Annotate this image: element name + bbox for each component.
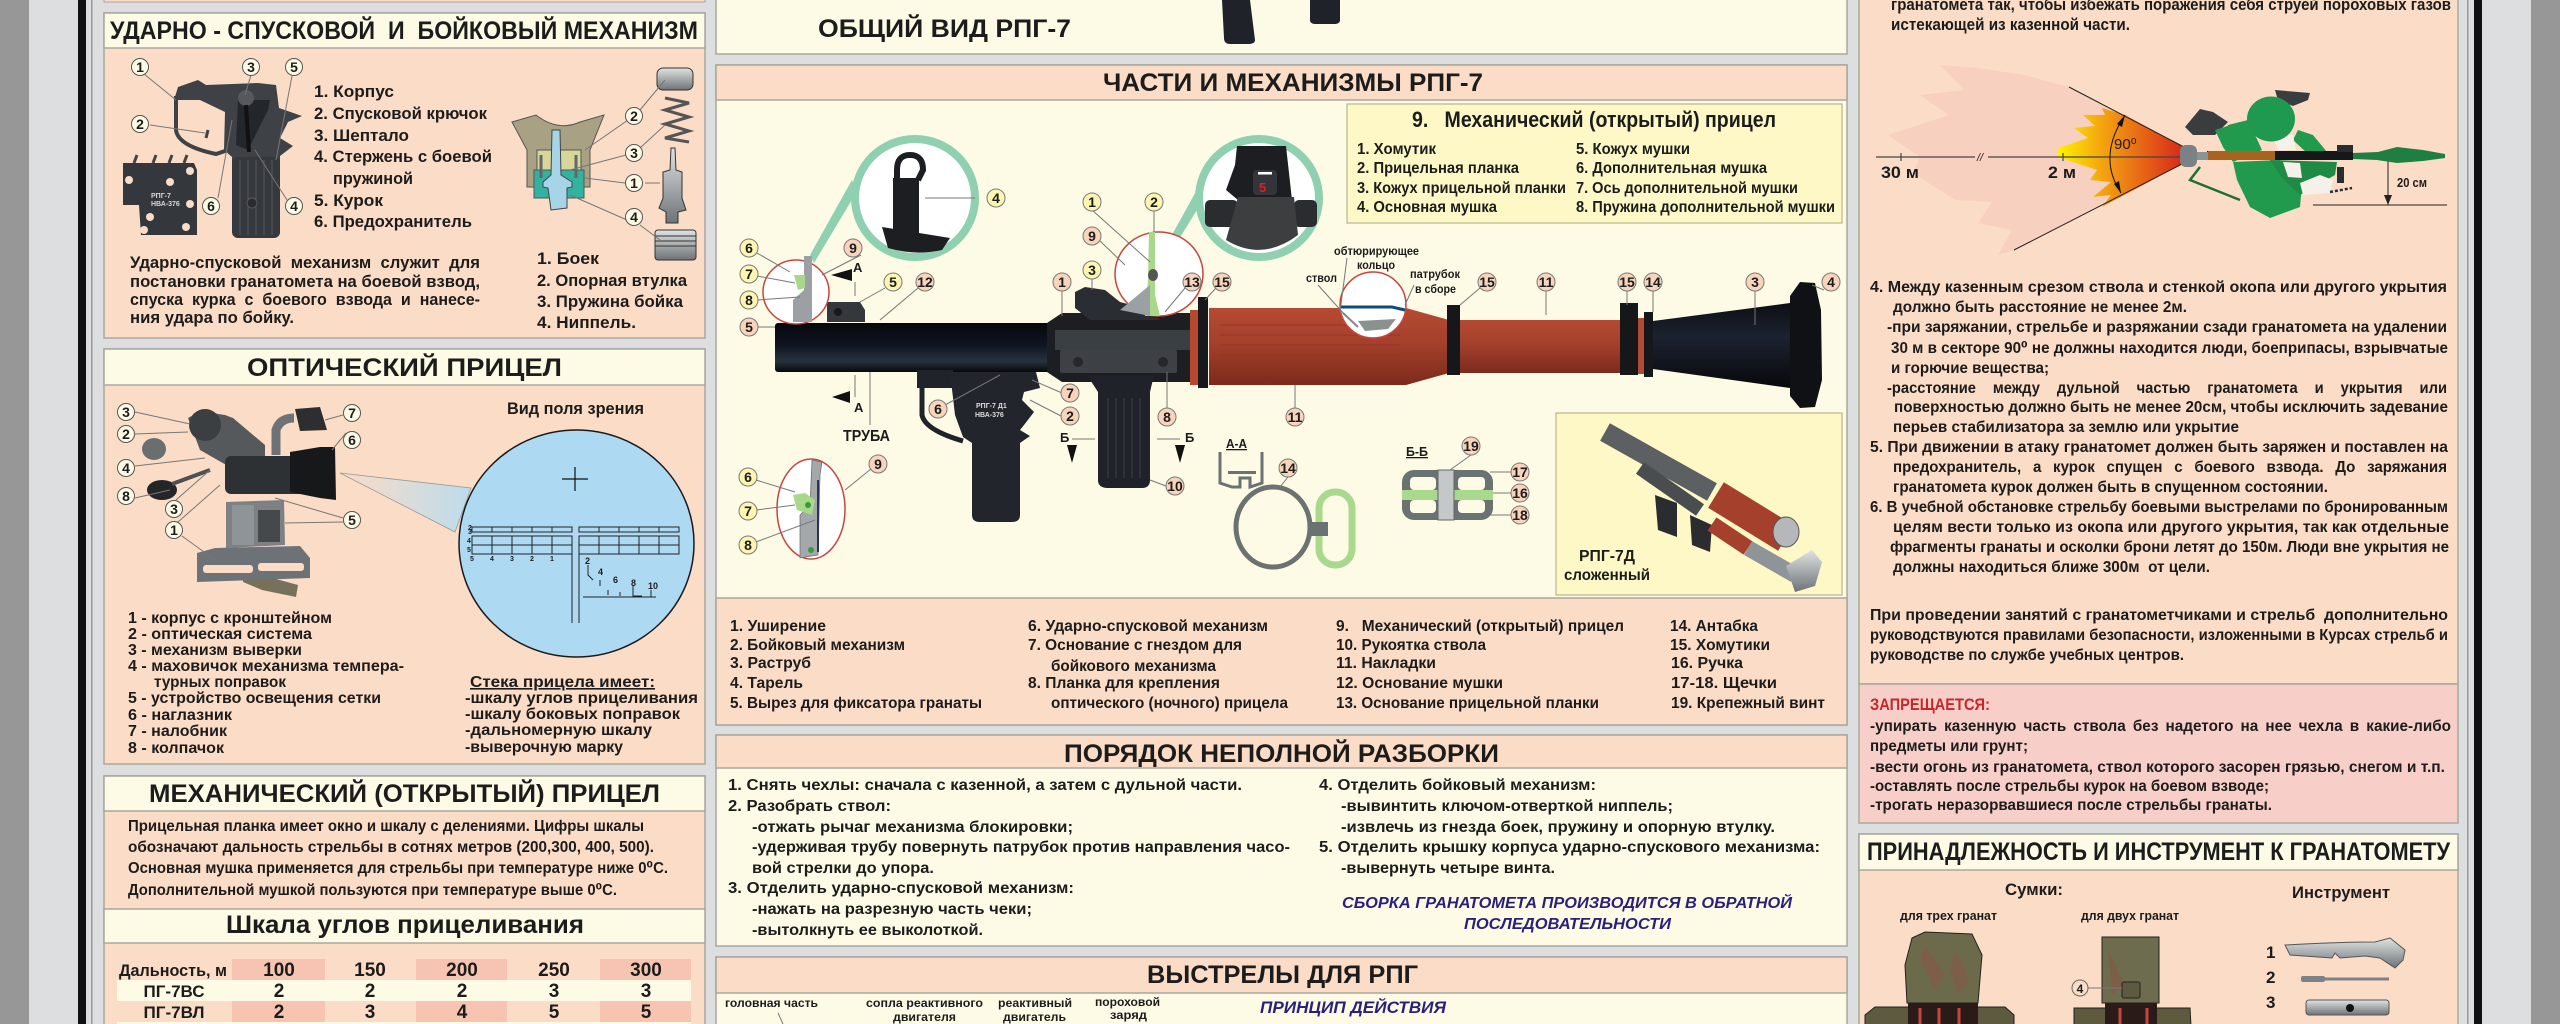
grip section Б-Б: Б-Б bbox=[1406, 444, 1428, 459]
section arrows and labels: обтюрирующее bbox=[1334, 244, 1419, 258]
number markers: launcher: 8 bbox=[744, 537, 752, 553]
chart: field of view reticle: 2 bbox=[468, 525, 472, 532]
number markers: launcher: 11 bbox=[1539, 274, 1554, 290]
leader lines and number markers: 6 bbox=[207, 198, 215, 214]
parts: cap, spring, pin, nipple bbox=[655, 68, 696, 260]
leader lines and number markers: 3 bbox=[247, 59, 255, 75]
leader lines and markers: optical sight: 3 bbox=[170, 501, 178, 517]
number markers: launcher: 14 bbox=[1280, 460, 1296, 476]
section arrows and labels: патрубок bbox=[1410, 267, 1461, 281]
label: field of view: Вид поля зрения bbox=[507, 399, 644, 418]
number markers: launcher: 2 bbox=[1066, 408, 1074, 424]
diagram: danger zone: 30 м bbox=[1881, 163, 1919, 182]
RPG-7 launcher drawing: РПГ-7 Д1 bbox=[976, 403, 1007, 410]
list: optical sight parts: 1 - корпус с кронштейном bbox=[128, 610, 332, 627]
table: aiming angles bbox=[117, 959, 691, 1024]
leader lines and markers: optical sight bbox=[118, 404, 360, 560]
leader lines and markers: optical sight: 7 bbox=[348, 405, 356, 421]
text: mechanical sight description: Дополнительной мушкой пользуются при температуре выше 0⁰С. bbox=[128, 882, 617, 899]
text: safety rules 4-6: 6. В учебной обстановке стрельбу боевыми выстрелами по бронированным bbox=[1870, 499, 2448, 516]
round part labels: реактивный bbox=[998, 996, 1072, 1010]
icon: soldier with launcher bbox=[2180, 90, 2445, 218]
number markers: launcher: 4 bbox=[992, 190, 1000, 206]
heading: operating principle: ПРИНЦИП ДЕЙСТВИЯ bbox=[1260, 997, 1447, 1017]
table: aiming angles: 2 bbox=[274, 981, 284, 1002]
text: prohibited list: -трогать неразорвавшиеся после стрельбы гранаты. bbox=[1870, 797, 2272, 814]
diagram: danger zone: // bbox=[1976, 152, 1984, 164]
table: aiming angles: 300 bbox=[630, 960, 662, 981]
panel: accessories and tools bbox=[1859, 834, 2458, 1024]
text: disassembly steps left bbox=[728, 777, 1290, 939]
list: firing mechanism parts bbox=[537, 249, 688, 332]
text: safety rules 4-6 bbox=[1870, 279, 2449, 576]
leader lines and markers: optical sight: 5 bbox=[348, 512, 356, 528]
leader lines and number markers: 4 bbox=[290, 198, 298, 214]
number markers: launcher: 19 bbox=[1463, 438, 1479, 454]
text: reticle contents bbox=[465, 674, 698, 756]
table: aiming angles: 3 bbox=[365, 1002, 375, 1023]
list: optical sight parts: 5 - устройство освещения сетки bbox=[128, 690, 381, 707]
number markers: launcher: 5 bbox=[889, 274, 897, 290]
chart: field of view reticle bbox=[459, 430, 694, 657]
number markers: launcher: 1 bbox=[1058, 274, 1066, 290]
table: aiming angles: 4 bbox=[457, 1002, 468, 1023]
text: trigger purpose: постановки гранатомета на боевой взвод, bbox=[130, 272, 480, 291]
icon: tools: 3 bbox=[2266, 993, 2275, 1012]
leader lines and markers: optical sight: 1 bbox=[170, 522, 178, 538]
text: reticle contents: -шкалу углов прицеливания bbox=[465, 690, 698, 707]
icon: bag for two grenades bbox=[2072, 937, 2191, 1024]
list: launcher parts: 10. Рукоятка ствола bbox=[1336, 637, 1486, 654]
list: launcher parts: 5. Вырез для фиксатора гранаты bbox=[730, 695, 982, 712]
table: aiming angles: 200 bbox=[446, 960, 478, 981]
list: launcher parts: 17-18. Щечки bbox=[1671, 675, 1777, 692]
number markers: launcher: 9 bbox=[1088, 228, 1096, 244]
text: safety rules 4-6: целям вести только из окопа или другого укрытия, так как отдельные bbox=[1893, 519, 2449, 536]
list: optical sight parts: 4 - маховичок механизма темпера- bbox=[128, 658, 404, 675]
leader lines and number markers: 1 bbox=[136, 59, 144, 75]
inset: front sight cross-section bbox=[777, 459, 845, 559]
section arrows and labels: в сборе bbox=[1415, 282, 1456, 296]
text: additional rules bbox=[1870, 607, 2448, 664]
table: aiming angles: Дальность, м bbox=[119, 961, 227, 980]
text: prohibited list: -вести огонь из гранатомета, ствол которого засорен грязью, снегом и т.п. bbox=[1870, 759, 2445, 776]
labels: bags and tools: для двух гранат bbox=[2081, 908, 2179, 923]
labels: bags and tools bbox=[1900, 880, 2390, 923]
text: reticle contents: Стека прицела имеет: bbox=[470, 674, 655, 691]
text: prohibited list: предметы или грунт; bbox=[1870, 738, 2028, 755]
text: safety rules 4-6: 4. Между казенным срезом ствола и стенкой окопа или другого укрытия bbox=[1870, 279, 2447, 296]
photo: optical sight bbox=[142, 407, 336, 597]
list: launcher parts: 19. Крепежный винт bbox=[1671, 695, 1825, 712]
list: optical sight parts bbox=[128, 610, 404, 757]
list: optical sight parts: 8 - колпачок bbox=[128, 740, 225, 757]
icon: tools: 2 bbox=[2266, 968, 2275, 987]
panel: mechanical sight bbox=[104, 776, 705, 1024]
leader lines and number markers: 3 bbox=[630, 145, 638, 161]
chart: field of view reticle: 4 bbox=[598, 567, 603, 577]
table: aiming angles: 2 bbox=[365, 981, 375, 1002]
table: aiming angles: 2 bbox=[457, 981, 467, 1002]
list: optical sight parts: 7 - налобник bbox=[128, 723, 228, 740]
table: aiming angles: 250 bbox=[538, 960, 570, 981]
heading: mechanical sight: МЕХАНИЧЕСКИЙ (ОТКРЫТЫЙ) ПРИЦЕЛ bbox=[149, 778, 660, 808]
heading: optical sight: ОПТИЧЕСКИЙ ПРИЦЕЛ bbox=[247, 352, 562, 382]
section arrows and labels: ствол bbox=[1306, 271, 1337, 285]
text: additional rules: При проведении занятий с гранатометчиками и стрельб дополнительно bbox=[1870, 607, 2448, 624]
diagram: danger zone: 20 см bbox=[2397, 175, 2427, 190]
list: trigger parts: 2. Спусковой крючок bbox=[314, 104, 487, 123]
number markers: launcher: 8 bbox=[1163, 409, 1171, 425]
number markers: launcher: 9 bbox=[874, 456, 882, 472]
text: prohibited list bbox=[1870, 718, 2451, 814]
box: folded RPG-7D: сложенный bbox=[1564, 567, 1650, 584]
icon: tools: 1 bbox=[2266, 943, 2275, 962]
table: aiming angles: ПГ-7ВЛ bbox=[144, 1003, 204, 1022]
box: mechanical sight legend bbox=[1347, 104, 1842, 223]
round part labels: двигателя bbox=[893, 1010, 956, 1024]
heading: trigger mechanism: УДАРНО - СПУСКОВОЙ И БОЙКОВЫЙ МЕХАНИЗМ bbox=[110, 15, 698, 45]
chart: field of view reticle: 2 bbox=[585, 556, 590, 566]
number markers: launcher: 1 bbox=[1088, 194, 1096, 210]
sling swivel section А-А: А-А bbox=[1226, 436, 1248, 451]
number markers: launcher: 9 bbox=[849, 240, 857, 256]
chart: field of view reticle: 1 bbox=[550, 556, 554, 563]
heading: prohibited: ЗАПРЕЩАЕТСЯ: bbox=[1870, 695, 1990, 714]
RPG-7 launcher drawing bbox=[775, 282, 1822, 522]
list: trigger parts: 1. Корпус bbox=[314, 82, 394, 101]
section arrows and labels: ТРУБА bbox=[843, 428, 890, 445]
grips of general view gun bbox=[1222, 0, 1340, 44]
photo: trigger mechanism: РПГ-7 bbox=[151, 193, 171, 200]
text: mechanical sight description: Прицельная планка имеет окно и шкалу с делениями. Цифры шкалы bbox=[128, 818, 644, 835]
chart: field of view reticle: 6 bbox=[613, 575, 618, 585]
labels: bags and tools: Инструмент bbox=[2292, 883, 2390, 902]
text: trigger purpose bbox=[130, 253, 480, 327]
inset: obturator ring cut-away bbox=[1340, 272, 1406, 338]
number markers: launcher: 7 bbox=[1066, 385, 1074, 401]
list: launcher parts: 11. Накладки bbox=[1336, 655, 1436, 672]
leader lines and markers: optical sight: 2 bbox=[122, 426, 130, 442]
leader lines and markers: optical sight: 8 bbox=[122, 488, 130, 504]
number markers: launcher: 4 bbox=[1827, 274, 1835, 290]
heading: disassembly: ПОРЯДОК НЕПОЛНОЙ РАЗБОРКИ bbox=[1064, 738, 1499, 768]
note: reassembly: ПОСЛЕДОВАТЕЛЬНОСТИ bbox=[1464, 916, 1671, 933]
box: mechanical sight legend: 7. Ось дополнительной мушки bbox=[1576, 180, 1798, 197]
chart: field of view reticle: 5 bbox=[470, 556, 474, 563]
note: reassembly bbox=[1342, 892, 1792, 933]
firing pin cross-section bbox=[512, 115, 604, 210]
list: optical sight parts: 2 - оптическая система bbox=[128, 626, 312, 643]
number markers: launcher: 6 bbox=[745, 240, 753, 256]
list: trigger parts bbox=[314, 82, 492, 231]
text: safety rules 4-6: 5. При движении в атаку гранатомет должен быть заряжен и поставлен на bbox=[1870, 439, 2448, 456]
list: trigger parts: 6. Предохранитель bbox=[314, 212, 472, 231]
text: disassembly steps left: -отжать рычаг механизма блокировки; bbox=[752, 819, 1073, 836]
leader lines and number markers: 2 bbox=[630, 108, 638, 124]
list: launcher parts bbox=[730, 618, 1825, 712]
list: optical sight parts: турных поправок bbox=[154, 674, 287, 691]
RPG-7 launcher drawing: НВА-376 bbox=[975, 412, 1004, 419]
box: mechanical sight legend: 5. Кожух мушки bbox=[1576, 141, 1690, 158]
text: safety rules 4-6: гранатомета курок должен быть в спущенном состоянии. bbox=[1893, 479, 2328, 496]
heading: parts and mechanisms: ЧАСТИ И МЕХАНИЗМЫ РПГ-7 bbox=[1103, 69, 1483, 97]
text: disassembly steps right: -вывернуть четыре винта. bbox=[1341, 860, 1555, 877]
list: launcher parts: 14. Антабка bbox=[1670, 618, 1758, 635]
text: safety intro bbox=[1891, 0, 2451, 34]
box: mechanical sight legend: 8. Пружина дополнительной мушки bbox=[1576, 199, 1835, 216]
photo: trigger mechanism bbox=[123, 80, 302, 238]
text: additional rules: руководстве по службе учебных центров. bbox=[1870, 647, 2184, 664]
diagram: danger zone: 2 м bbox=[2048, 163, 2076, 182]
chart: field of view reticle: 8 bbox=[631, 578, 636, 588]
table: aiming angles: 3 bbox=[549, 981, 559, 1002]
panel: general view bbox=[716, 0, 1847, 54]
icon: bag for three grenades bbox=[1865, 932, 2014, 1024]
list: launcher parts: 9. Механический (открытый) прицел bbox=[1336, 618, 1624, 635]
number markers: launcher: 12 bbox=[917, 274, 933, 290]
diagram: danger zone: 90⁰ bbox=[2114, 136, 2137, 153]
text: disassembly steps right: 5. Отделить крышку корпуса ударно-спускового механизма: bbox=[1319, 839, 1820, 856]
chart: field of view reticle: 4 bbox=[467, 538, 471, 545]
text: reticle contents: -выверочную марку bbox=[465, 739, 623, 756]
box: folded RPG-7D: РПГ-7Д bbox=[1579, 548, 1636, 565]
text: safety rules 4-6: предохранитель, а курок спущен с боевого взвода. До заряжания bbox=[1893, 459, 2447, 476]
panel: rounds for RPG bbox=[716, 957, 1847, 1024]
number markers: launcher: 15 bbox=[1619, 274, 1635, 290]
text: safety rules 4-6: должно быть расстояние не менее 2м. bbox=[1893, 299, 2187, 316]
text: additional rules: руководствуются правилами безопасности, изложенными в Курсах стрельб и bbox=[1870, 627, 2448, 644]
text: safety rules 4-6: 30 м в секторе 90⁰ не должны находится люди, боеприпасы, взрывчатые bbox=[1891, 340, 2448, 357]
chart: field of view reticle: 10 bbox=[648, 581, 658, 591]
number markers: launcher: 18 bbox=[1512, 507, 1528, 523]
list: launcher parts: 2. Бойковый механизм bbox=[730, 637, 905, 654]
box: mechanical sight legend: 2. Прицельная планка bbox=[1357, 160, 1519, 177]
round part labels: заряд bbox=[1110, 1008, 1147, 1022]
text: mechanical sight description: обозначают дальность стрельбы в сотнях метров (200,300, 400, 500). bbox=[128, 839, 654, 856]
table: aiming angles: 2 bbox=[274, 1002, 284, 1023]
list: firing mechanism parts: 2. Опорная втулка bbox=[537, 271, 688, 290]
text: disassembly steps left: 1. Снять чехлы: сначала с казенной, а затем с дульной части. bbox=[728, 777, 1242, 794]
number markers: launcher: 7 bbox=[744, 503, 752, 519]
section arrows and labels: кольцо bbox=[1357, 258, 1395, 272]
round part labels: пороховой bbox=[1095, 995, 1160, 1009]
sling swivel section А-А bbox=[1220, 436, 1352, 567]
leader lines and number markers: 4 bbox=[630, 209, 638, 225]
number markers: launcher: 15 bbox=[1214, 274, 1230, 290]
panel: optical sight bbox=[104, 349, 705, 764]
number markers: launcher: 17 bbox=[1512, 464, 1528, 480]
number markers: launcher: 2 bbox=[1150, 194, 1158, 210]
text: disassembly steps left: 2. Разобрать ствол: bbox=[728, 798, 891, 815]
round part labels: головная часть bbox=[725, 996, 818, 1010]
list: launcher parts: 4. Тарель bbox=[730, 675, 803, 692]
list: launcher parts: 7. Основание с гнездом для bbox=[1028, 637, 1242, 654]
labels: bags and tools: Сумки: bbox=[2005, 880, 2063, 899]
text: safety rules 4-6: должны находиться ближе 300м от цели. bbox=[1893, 559, 2210, 576]
section arrows and labels: А bbox=[854, 400, 864, 415]
text: safety rules 4-6: -при заряжании, стрельбе и разряжании сзади гранатомета на удалении bbox=[1887, 319, 2447, 336]
panel: disassembly order bbox=[716, 735, 1847, 946]
table: aiming angles: 150 bbox=[354, 960, 386, 981]
text: disassembly steps right bbox=[1319, 777, 1820, 877]
leader lines and markers: optical sight: 4 bbox=[122, 460, 130, 476]
text: safety rules 4-6: -расстояние между дульной частью гранатомета и укрытия или bbox=[1887, 380, 2447, 397]
text: safety rules 4-6: и горючие вещества; bbox=[1891, 360, 2049, 377]
list: firing mechanism parts: 1. Боек bbox=[537, 249, 600, 268]
table: aiming angles: ПГ-7ВС bbox=[144, 982, 204, 1001]
text: disassembly steps left: 3. Отделить ударно-спусковой механизм: bbox=[728, 880, 1074, 897]
list: launcher parts: 1. Уширение bbox=[730, 618, 826, 635]
number markers: launcher: 16 bbox=[1512, 485, 1528, 501]
table: aiming angles: 5 bbox=[641, 1002, 652, 1023]
box: folded RPG-7D bbox=[1556, 413, 1842, 595]
number markers: launcher: 15 bbox=[1479, 274, 1495, 290]
chart: field of view reticle: 5 bbox=[467, 547, 471, 554]
leader lines and number markers: 1 bbox=[630, 175, 638, 191]
list: launcher parts: 16. Ручка bbox=[1671, 655, 1743, 672]
list: trigger parts: 3. Шептало bbox=[314, 126, 409, 145]
number markers: launcher: 3 bbox=[1088, 262, 1096, 278]
text: disassembly steps left: -удерживая трубу повернуть патрубок против направления часо- bbox=[752, 839, 1290, 856]
number markers: launcher: 8 bbox=[745, 292, 753, 308]
text: safety rules 4-6: поверхностью должно быть не менее 20см, чтобы исключить задевание bbox=[1894, 399, 2448, 416]
leader lines and number markers: 5 bbox=[290, 59, 298, 75]
text: disassembly steps left: -нажать на разрезную часть чеки; bbox=[752, 901, 1032, 918]
round part labels: сопла реактивного bbox=[866, 996, 983, 1010]
leader lines and markers: optical sight: 3 bbox=[122, 404, 130, 420]
round part labels bbox=[725, 995, 1160, 1024]
icon: tools bbox=[2266, 938, 2405, 1015]
text: trigger purpose: спуска курка с боевого взвода и нанесе- bbox=[130, 290, 480, 309]
list: launcher parts: 8. Планка для крепления bbox=[1028, 675, 1220, 692]
grip section Б-Б bbox=[1402, 444, 1493, 520]
table: aiming angles: 3 bbox=[641, 981, 651, 1002]
round part labels: двигатель bbox=[1003, 1010, 1066, 1024]
panel: trigger and firing mechanism bbox=[104, 13, 705, 338]
inset circles with sights bbox=[763, 139, 1319, 324]
leader lines and number markers bbox=[132, 58, 665, 240]
photo: trigger mechanism: НВА-376 bbox=[151, 201, 180, 208]
text: disassembly steps left: вой стрелки до упора. bbox=[752, 860, 934, 877]
number markers: launcher bbox=[739, 189, 1840, 554]
section arrows and labels: Б bbox=[1060, 430, 1069, 445]
box: mechanical sight legend: 4. Основная мушка bbox=[1357, 199, 1497, 216]
number markers: launcher: 5 bbox=[745, 319, 753, 335]
heading: accessories: ПРИНАДЛЕЖНОСТЬ И ИНСТРУМЕНТ К ГРАНАТОМЕТУ bbox=[1867, 838, 2450, 866]
text: safety intro: истекающей из казенной части. bbox=[1891, 15, 2130, 34]
table: aiming angles: 100 bbox=[263, 960, 295, 981]
number markers: launcher: 14 bbox=[1645, 274, 1661, 290]
number markers: launcher: 7 bbox=[745, 266, 753, 282]
list: launcher parts: 12. Основание мушки bbox=[1336, 675, 1503, 692]
panel: safety rules bbox=[1859, 0, 2458, 684]
chart: field of view reticle: 2 bbox=[530, 556, 534, 563]
text: prohibited list: -упирать казенную часть ствола без надетого на нее чехла в какие-либо bbox=[1870, 718, 2451, 735]
text: disassembly steps right: -вывинтить ключом-отверткой ниппель; bbox=[1341, 798, 1673, 815]
list: launcher parts: 3. Раструб bbox=[730, 655, 811, 672]
chart: field of view reticle: 3 bbox=[510, 556, 514, 563]
text: disassembly steps right: -извлечь из гнезда боек, пружину и опорную втулку. bbox=[1341, 819, 1775, 836]
number markers: launcher: 11 bbox=[1288, 409, 1303, 425]
box: mechanical sight legend: 9. Механический (открытый) прицел bbox=[1412, 107, 1776, 132]
number markers: launcher: 6 bbox=[934, 401, 942, 417]
labels: bags and tools: для трех гранат bbox=[1900, 908, 1997, 923]
list: trigger parts: пружиной bbox=[333, 169, 413, 188]
text: safety rules 4-6: перьев стабилизатора за землю или укрытие bbox=[1893, 419, 2239, 436]
text: disassembly steps right: 4. Отделить бойковый механизм: bbox=[1319, 777, 1596, 794]
text: prohibited list: -оставлять после стрельбы курок на боевом взводе; bbox=[1870, 778, 2269, 795]
list: firing mechanism parts: 3. Пружина бойка bbox=[537, 292, 684, 311]
heading: general view: ОБЩИЙ ВИД РПГ-7 bbox=[818, 13, 1071, 43]
section arrows and labels bbox=[831, 244, 1461, 463]
number markers: launcher: 13 bbox=[1184, 274, 1200, 290]
text: reticle contents: -шкалу боковых поправок bbox=[465, 706, 681, 723]
list: trigger parts: 4. Стержень с боевой bbox=[314, 147, 492, 166]
callout beam bbox=[340, 473, 471, 532]
text: mechanical sight description bbox=[128, 818, 668, 899]
heading: rounds: ВЫСТРЕЛЫ ДЛЯ РПГ bbox=[1147, 961, 1418, 989]
list: launcher parts: 15. Хомутики bbox=[1670, 637, 1770, 654]
number markers: launcher: 10 bbox=[1167, 478, 1183, 494]
section arrows and labels: А bbox=[853, 260, 863, 275]
leader lines: launcher bbox=[756, 198, 1824, 542]
heading: aiming angle scale: Шкала углов прицеливания bbox=[226, 911, 584, 939]
chart: field of view reticle: 4 bbox=[490, 556, 494, 563]
list: launcher parts: бойкового механизма bbox=[1051, 658, 1216, 675]
text: trigger purpose: Ударно-спусковой механизм служит для bbox=[130, 253, 480, 272]
list: optical sight parts: 3 - механизм выверки bbox=[128, 642, 302, 659]
list: firing mechanism parts: 4. Ниппель. bbox=[537, 313, 636, 332]
section arrows and labels: Б bbox=[1185, 430, 1194, 445]
number markers: launcher: 6 bbox=[744, 469, 752, 485]
text: mechanical sight description: Основная мушка применяется для стрельбы при температуре ниже 0⁰С. bbox=[128, 860, 668, 877]
leader lines and number markers: 2 bbox=[136, 116, 144, 132]
inset circles with sights: 5 bbox=[1259, 180, 1266, 195]
table: aiming angles: 5 bbox=[549, 1002, 560, 1023]
text: trigger purpose: ния удара по бойку. bbox=[130, 308, 294, 327]
text: reticle contents: -дальномерную шкалу bbox=[465, 722, 652, 739]
list: launcher parts: 6. Ударно-спусковой механизм bbox=[1028, 618, 1268, 635]
box: mechanical sight legend: 3. Кожух прицельной планки bbox=[1357, 180, 1566, 197]
box: mechanical sight legend: 6. Дополнительная мушка bbox=[1576, 160, 1767, 177]
box: mechanical sight legend: 1. Хомутик bbox=[1357, 141, 1437, 158]
diagram: danger zone bbox=[1876, 65, 2447, 255]
icon: bag for two grenades: 4 bbox=[2077, 982, 2084, 996]
panel: parts and mechanisms bbox=[716, 65, 1847, 725]
text: disassembly steps left: -вытолкнуть ее выколоткой. bbox=[752, 922, 983, 939]
list: trigger parts: 5. Курок bbox=[314, 191, 383, 210]
chart: field of view reticle: 3 bbox=[468, 529, 472, 536]
list: launcher parts: 13. Основание прицельной планки bbox=[1336, 695, 1599, 712]
panel: prohibited actions bbox=[1859, 684, 2458, 823]
text: safety rules 4-6: фрагменты гранаты и осколки брони летят до 150м. Люди вне укрытия не bbox=[1890, 539, 2449, 556]
note: reassembly: СБОРКА ГРАНАТОМЕТА ПРОИЗВОДИТСЯ В ОБРАТНОЙ bbox=[1342, 892, 1792, 912]
number markers: launcher: 3 bbox=[1751, 274, 1759, 290]
list: optical sight parts: 6 - наглазник bbox=[128, 707, 233, 724]
list: launcher parts: оптического (ночного) прицела bbox=[1051, 695, 1288, 712]
leader lines and markers: optical sight: 6 bbox=[348, 432, 356, 448]
